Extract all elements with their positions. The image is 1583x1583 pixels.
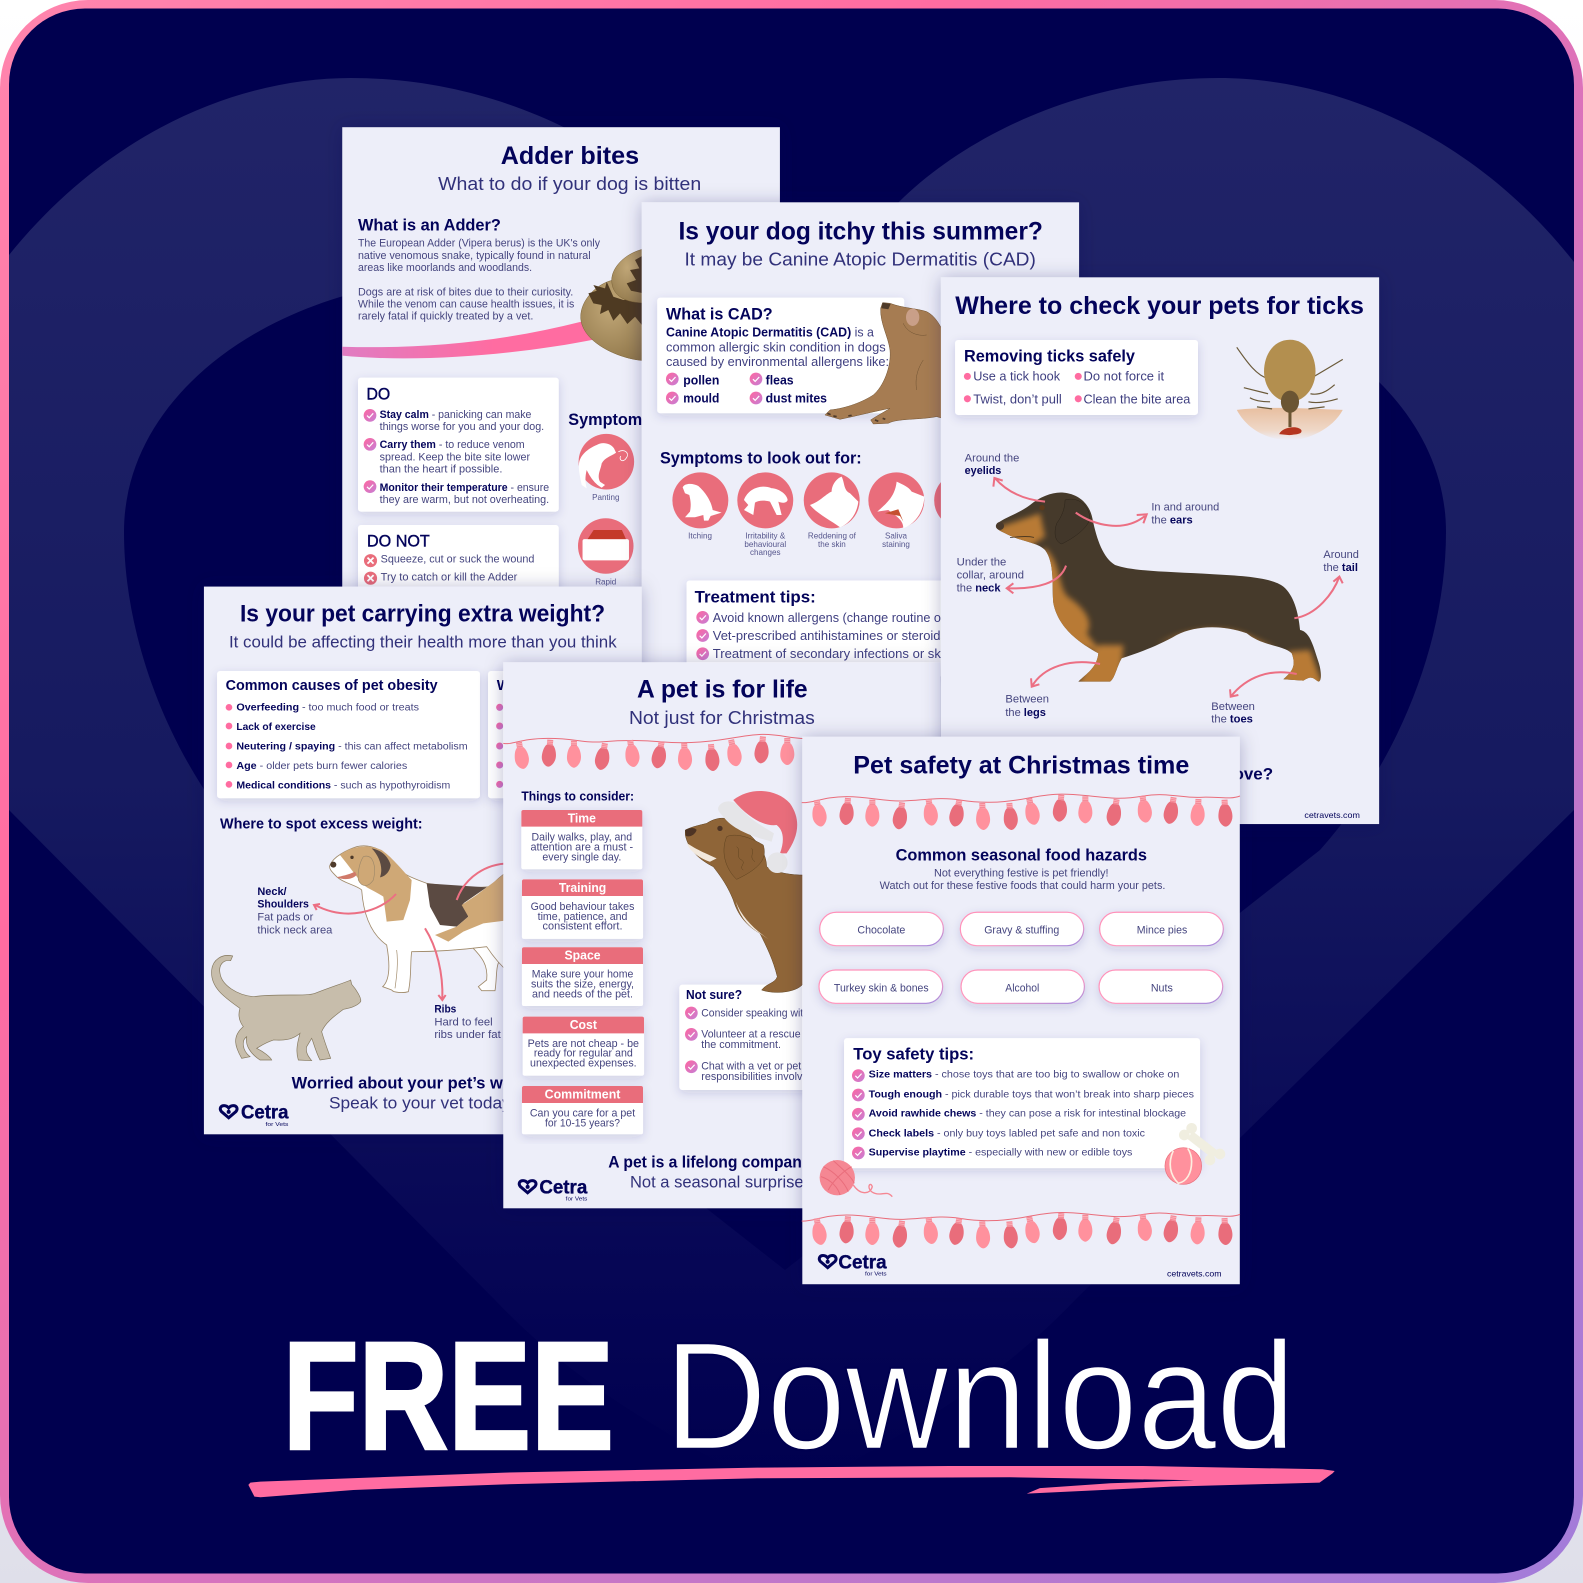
heading: things to consider: Things to consider: <box>521 790 634 804</box>
panel: pet for life poster <box>503 662 940 1208</box>
card: removing ticks safely: Twist, don’t pull <box>973 392 1062 406</box>
card: DO: Stay calm - panicking can make <box>380 409 531 421</box>
label: ribs: Hard to feel <box>434 1016 493 1028</box>
icon row: CAD symptoms: changes <box>750 548 781 557</box>
panel: canine atopic dermatitis poster <box>642 202 1079 808</box>
text block: hazards intro: Watch out for these festive foods that could harm your pets. <box>880 880 1165 892</box>
card: causes of obesity: Lack of exercise <box>236 722 316 733</box>
card: not sure: Chat with a vet or pet professional about the <box>701 1060 908 1072</box>
card: time <box>521 810 642 869</box>
illustration: coiled adder <box>581 248 647 361</box>
subtitle: Not just for Christmas <box>629 708 815 728</box>
subtitle: It may be Canine Atopic Dermatitis (CAD) <box>685 250 1036 270</box>
labels: tick check spots: the toes <box>1211 714 1253 726</box>
illustration: yarn ball <box>820 1160 892 1197</box>
card: space <box>522 947 643 1006</box>
pills: food hazards: Gravy & stuffing <box>984 924 1059 936</box>
card: toy safety tips: Supervise playtime - especially with new or edible toys <box>869 1148 1132 1159</box>
decoration: christmas lights <box>503 734 867 772</box>
label: neck and shoulders <box>257 886 332 936</box>
title: pet safety at christmas: Pet safety at Christmas time <box>853 751 1189 779</box>
illustration: dog in santa hat <box>685 791 803 992</box>
card: space: Make sure your home <box>532 969 633 981</box>
card: training: time, patience, and <box>538 911 628 923</box>
labels: tick check spots: Between <box>1005 694 1049 706</box>
pills: food hazards <box>819 912 1223 1003</box>
card: what is CAD: Canine Atopic Dermatitis (CAD) is a <box>666 326 875 340</box>
card: removing ticks safely: Removing ticks safely <box>964 348 1135 366</box>
card: commitment: for 10-15 years? <box>545 1117 620 1129</box>
card: space: suits the size, energy, <box>531 978 634 990</box>
subtitle: It could be affecting their health more than you think <box>229 634 618 652</box>
title: a pet for life: A pet is for life <box>637 676 808 704</box>
card: second partly hidden list: What to do <box>497 678 572 694</box>
card: time: attention are a must - <box>530 841 634 853</box>
card: cost: unexpected expenses. <box>530 1057 637 1069</box>
pink swoosh <box>342 322 596 358</box>
call to action: ticks: Worried about any of the above? <box>1010 765 1273 783</box>
logo: Cetra: for Vets <box>865 1272 887 1278</box>
card: not sure <box>679 985 908 1090</box>
card: not sure: Not sure? <box>686 987 742 1002</box>
card: causes of obesity: Neutering / spaying - this can affect metabolism <box>236 741 468 752</box>
label: ribs <box>434 1003 501 1041</box>
card: DO: things worse for you and your dog. <box>380 421 544 433</box>
card: treatment tips: Treatment of secondary infections or skin <box>713 647 951 661</box>
card: training: Training <box>559 880 606 895</box>
card: second partly hidden list <box>488 671 639 798</box>
label: neck and shoulders: Fat pads or <box>257 912 314 924</box>
card: what is CAD: pollen <box>683 373 719 387</box>
illustration: overweight beagle <box>314 846 510 1000</box>
website: cetravets.com <box>1304 811 1360 820</box>
main heading: free download <box>283 1310 1295 1482</box>
card: removing ticks safely: Clean the bite area <box>1084 392 1191 406</box>
heading: where to spot excess weight: Where to spot excess weight: <box>220 816 423 832</box>
card: cost: Cost <box>570 1017 598 1032</box>
brush underline <box>248 1466 1335 1497</box>
illustration: bone and ball <box>1165 1123 1225 1184</box>
card: toy safety tips <box>844 1038 1200 1168</box>
card: training: Good behaviour takes <box>531 901 634 913</box>
labels: tick check spots <box>957 453 1359 726</box>
labels: tick check spots: the ears <box>1151 514 1193 526</box>
card: treatment tips: Treatment tips: <box>695 589 816 607</box>
label: neck and shoulders: Shoulders <box>257 899 309 911</box>
labels: tick check spots: Around <box>1323 549 1359 561</box>
text block: hazards intro: Not everything festive is pet friendly! <box>934 868 1109 880</box>
card: not sure: Volunteer at a rescue to understand <box>701 1029 868 1041</box>
card: removing ticks safely: Use a tick hook <box>973 370 1061 384</box>
decoration: bottom christmas lights <box>802 1212 1240 1249</box>
label: neck and shoulders: thick neck area <box>257 924 332 936</box>
text block: adder description: native venomous snake, typically found in natural <box>358 250 591 262</box>
card: DO: spread. Keep the bite site lower <box>380 452 531 464</box>
labels: tick check spots: eyelids <box>965 465 1001 477</box>
logo: Cetra: Cetra <box>241 1102 289 1123</box>
labels: tick check spots: the neck <box>957 583 1001 595</box>
card: toy safety tips: Tough enough - pick durable toys that won’t break into sharp pieces <box>869 1089 1194 1100</box>
card: time: every single day. <box>542 851 621 863</box>
labels: tick check spots: collar, around <box>957 570 1024 582</box>
call to action: weight <box>292 1074 552 1112</box>
card: what is CAD: caused by environmental allergens like: <box>666 355 889 369</box>
label: ribs: Ribs <box>434 1003 456 1015</box>
illustration: dachshund with arrows <box>993 478 1343 697</box>
illustration: overweight cat <box>212 955 361 1061</box>
card: toy safety tips: Check labels - only buy toys labled pet safe and non toxic <box>869 1128 1145 1139</box>
text block: hazards intro <box>880 868 1165 892</box>
card: what is CAD: fleas <box>766 373 794 387</box>
logo: Cetra: for Vets <box>566 1197 588 1203</box>
card: DO: Monitor their temperature - ensure <box>380 482 549 494</box>
title: extra weight: Is your pet carrying extra weight? <box>240 601 605 628</box>
card: treatment tips: Avoid known allergens (change routine or diet) <box>713 611 973 625</box>
card: causes of obesity: Medical conditions - such as hypothyroidism <box>236 780 450 791</box>
card: not sure: responsibilities involved. <box>701 1071 817 1083</box>
text block: adder description: rarely fatal if quickly treated by a vet. <box>358 310 533 322</box>
logo: Cetra: for Vets <box>266 1122 289 1128</box>
icon row: CAD symptoms: behavioural <box>744 540 786 549</box>
title: where to check for ticks: Where to check your pets for ticks <box>955 292 1364 320</box>
text block: adder description: While the venom can cause health issues, it is <box>358 298 574 310</box>
card: DO NOT: Try to catch or kill the Adder <box>381 571 518 583</box>
card: what is CAD: common allergic skin condition in dogs <box>666 340 886 354</box>
title: adder bites: Adder bites <box>501 142 639 170</box>
title: itchy dog: Is your dog itchy this summer? <box>678 217 1043 245</box>
labels: tick check spots: In and around <box>1151 502 1219 514</box>
card: DO NOT: DO NOT <box>367 532 430 551</box>
call to action: lifelong companion: A pet is a lifelong companion <box>608 1153 825 1171</box>
icon row: CAD symptoms: Irritability & <box>745 532 786 541</box>
card: causes of obesity: Age - older pets burn fewer calories <box>236 761 407 772</box>
panel: ticks poster <box>941 277 1379 824</box>
card: training <box>522 879 643 939</box>
logo: Cetra: Cetra <box>539 1177 588 1198</box>
call to action: lifelong companion: Not a seasonal surprise <box>630 1173 804 1191</box>
icon row: CAD symptoms: the skin <box>818 540 846 549</box>
illustration: itchy brown dog <box>825 303 960 424</box>
pills: food hazards: Nuts <box>1151 983 1173 995</box>
icon row: CAD symptoms: Itching <box>688 532 712 541</box>
text block: adder description: Dogs are at risk of bites due to their curiosity. <box>358 286 573 298</box>
card: training: consistent effort. <box>543 921 623 933</box>
label: ribs: ribs under fat <box>434 1029 501 1041</box>
card: cost: Pets are not cheap - be <box>528 1038 639 1050</box>
icon: rapid: Rapid <box>595 578 616 587</box>
card: commitment: Commitment <box>545 1087 621 1102</box>
card: removing ticks safely <box>955 340 1198 415</box>
card: removing ticks safely: Do not force it <box>1084 370 1165 384</box>
card: toy safety tips: Size matters - chose toys that are too big to swallow or choke on <box>869 1070 1179 1081</box>
logo: Cetra <box>519 1177 588 1203</box>
icon row: CAD symptoms: Reddening of <box>808 532 857 541</box>
panel: christmas safety poster <box>802 737 1240 1284</box>
card: DO NOT: Squeeze, cut or suck the wound <box>381 553 534 565</box>
heading: what is an adder: What is an Adder? <box>358 216 501 235</box>
pills: food hazards: Chocolate <box>857 924 905 936</box>
logo: Cetra: Cetra <box>838 1252 887 1273</box>
card: DO <box>358 378 559 512</box>
labels: tick check spots: the tail <box>1323 562 1358 574</box>
illustration: tick on skin <box>1237 340 1343 440</box>
card: what is CAD <box>657 298 904 413</box>
website: cetravets.com <box>1167 1270 1222 1279</box>
text block: adder description: The European Adder (Vipera berus) is the UK's only <box>358 238 601 250</box>
pills: food hazards: Turkey skin & bones <box>834 983 929 995</box>
card: causes of obesity: Overfeeding - too much food or treats <box>236 703 419 714</box>
logo: Cetra <box>819 1252 887 1278</box>
card: toy safety tips: Toy safety tips: <box>853 1045 974 1063</box>
icon: panting <box>579 434 634 502</box>
main heading: free download: FREE <box>283 1310 614 1482</box>
card: not sure: the commitment. <box>701 1039 781 1051</box>
icon row: CAD symptoms: Saliva <box>885 532 908 541</box>
subtitle: What to do if your dog is bitten <box>438 174 701 194</box>
card: space: and needs of the pet. <box>532 988 633 1000</box>
card: treatment tips: Vet-prescribed antihistamines or steroids <box>713 629 947 643</box>
panel: adder bites poster <box>342 127 780 713</box>
decoration: top christmas lights <box>802 794 1240 831</box>
icon: panting: Panting <box>592 493 619 502</box>
card: time: Daily walks, play, and <box>532 832 632 844</box>
card: time: Time <box>568 810 596 825</box>
labels: tick check spots: Under the <box>957 557 1006 569</box>
card: toy safety tips: Avoid rawhide chews - they can pose a risk for intestinal blockage <box>869 1109 1186 1120</box>
card: DO: DO <box>366 384 390 403</box>
call to action: weight: Worried about your pet’s weight? <box>292 1074 552 1092</box>
heading: symptoms to look out for: Symptoms to look out for: <box>660 448 862 467</box>
card: space: Space <box>565 948 601 963</box>
card: cost: ready for regular and <box>534 1048 633 1060</box>
card: cost <box>523 1017 644 1076</box>
heading: food hazards: Common seasonal food hazards <box>896 845 1147 864</box>
labels: tick check spots: Between <box>1211 701 1255 713</box>
text block: adder description <box>358 238 601 322</box>
card: what is CAD: dust mites <box>766 391 827 405</box>
card: causes of obesity <box>217 671 480 798</box>
call to action: weight: Speak to your vet today <box>329 1094 512 1112</box>
card: treatment tips <box>687 581 979 676</box>
card: what is CAD: What is CAD? <box>666 304 773 323</box>
card: commitment: Can you care for a pet <box>530 1108 635 1120</box>
card: DO: than the heart if possible. <box>380 463 502 475</box>
heading: symptoms: Symptoms to look out for: <box>568 410 770 429</box>
card: not sure: Consider speaking with a vet <box>701 1008 835 1020</box>
card: DO: they are warm, but not overheating. <box>380 494 549 506</box>
card: commitment <box>522 1086 643 1134</box>
card: DO NOT <box>358 525 559 626</box>
card: DO: Carry them - to reduce venom <box>380 439 525 451</box>
card: what is CAD: mould <box>683 391 719 405</box>
icon row: CAD symptoms <box>672 472 990 557</box>
main heading: free download: Download <box>664 1310 1295 1482</box>
card: causes of obesity: Common causes of pet obesity <box>226 678 439 694</box>
pills: food hazards: Alcohol <box>1005 983 1039 995</box>
text block: adder description: areas like moorlands and woodlands. <box>358 262 532 274</box>
labels: tick check spots: the legs <box>1005 707 1046 719</box>
icon: rapid <box>578 518 634 587</box>
panel: pet weight poster <box>204 587 642 1134</box>
labels: tick check spots: Around the <box>965 453 1019 465</box>
call to action: lifelong companion <box>608 1153 825 1191</box>
pills: food hazards: Mince pies <box>1137 924 1187 936</box>
label: neck and shoulders: Neck/ <box>257 886 287 898</box>
logo: Cetra <box>220 1102 289 1128</box>
icon row: CAD symptoms: staining <box>882 540 910 549</box>
